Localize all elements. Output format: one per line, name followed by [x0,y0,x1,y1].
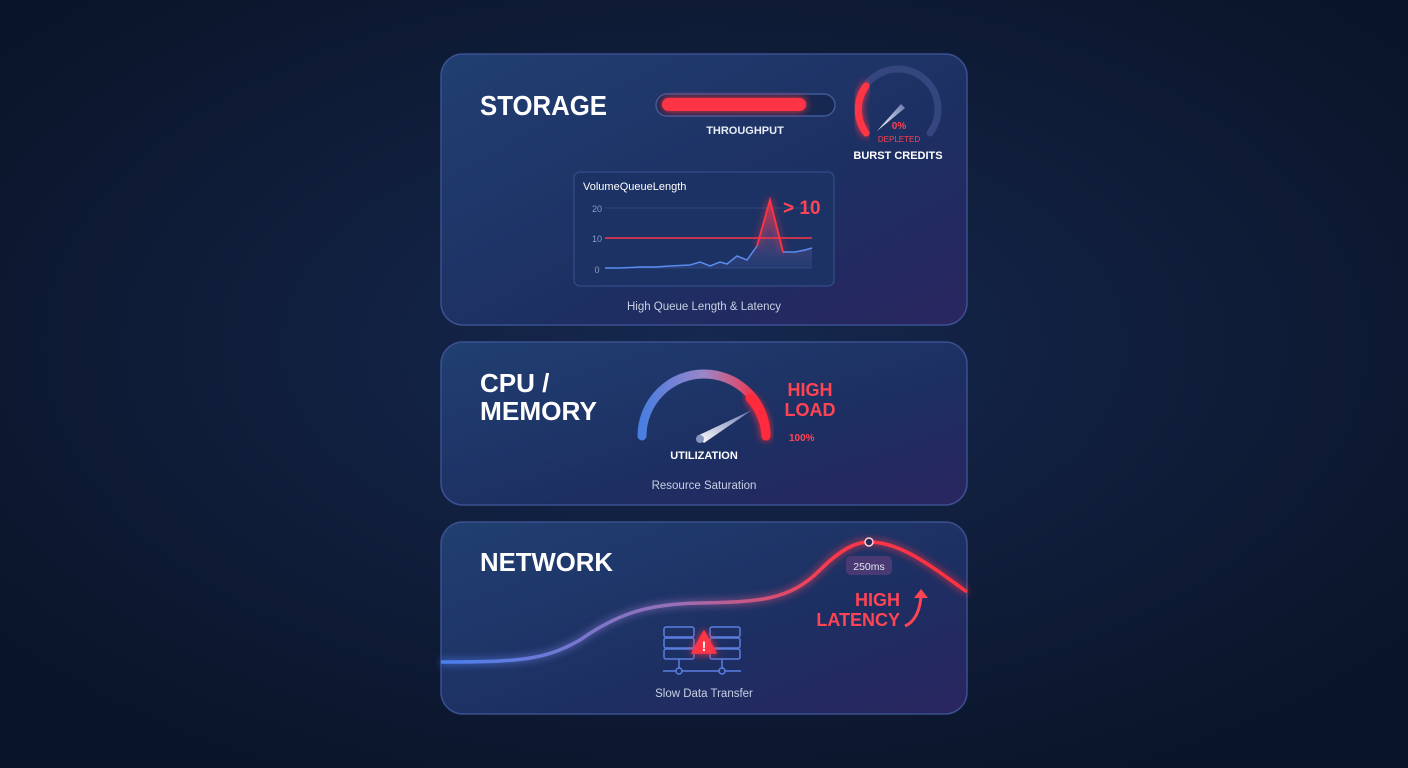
gauge: utilization: UTILIZATION [670,450,738,462]
gauge: utilization: 100% [789,433,815,444]
latency curve: 250ms [853,561,885,573]
caption: network: Slow Data Transfer [655,688,753,700]
panel: cpu / memory [441,342,967,505]
caption: storage: High Queue Length & Latency [627,301,781,313]
throughput bar: THROUGHPUT [706,125,784,137]
caption: cpu: Resource Saturation [652,480,756,492]
panel: network [441,522,967,714]
callout: high latency [816,589,928,630]
panel: storage [441,54,967,325]
latency curve [441,538,967,662]
icon: server warning: ! [702,638,706,654]
callout: high load: LOAD [784,400,836,420]
chart: VolumeQueueLength: 20 [592,204,602,214]
chart: VolumeQueueLength [574,172,834,286]
chart: VolumeQueueLength: > 10 [783,198,821,219]
chart: VolumeQueueLength: 0 [594,265,600,275]
callout: high latency: LATENCY [816,610,900,630]
callout: high latency: HIGH [855,590,900,610]
heading: network: NETWORK [480,547,613,577]
chart: VolumeQueueLength: 10 [592,234,602,244]
heading: cpu / memory: CPU / [480,368,549,398]
gauge: burst credits: DEPLETED [878,135,920,144]
callout: high load: HIGH [788,380,832,400]
heading: cpu / memory: MEMORY [480,396,597,426]
gauge: burst credits: BURST CREDITS [853,150,943,162]
heading: storage: STORAGE [480,90,607,121]
gauge: burst credits [853,69,943,162]
gauge: burst credits: 0% [892,121,906,132]
icon: server warning [663,627,741,674]
chart: VolumeQueueLength: VolumeQueueLength [583,181,686,193]
gauge: utilization [642,374,815,462]
throughput bar [656,94,835,137]
